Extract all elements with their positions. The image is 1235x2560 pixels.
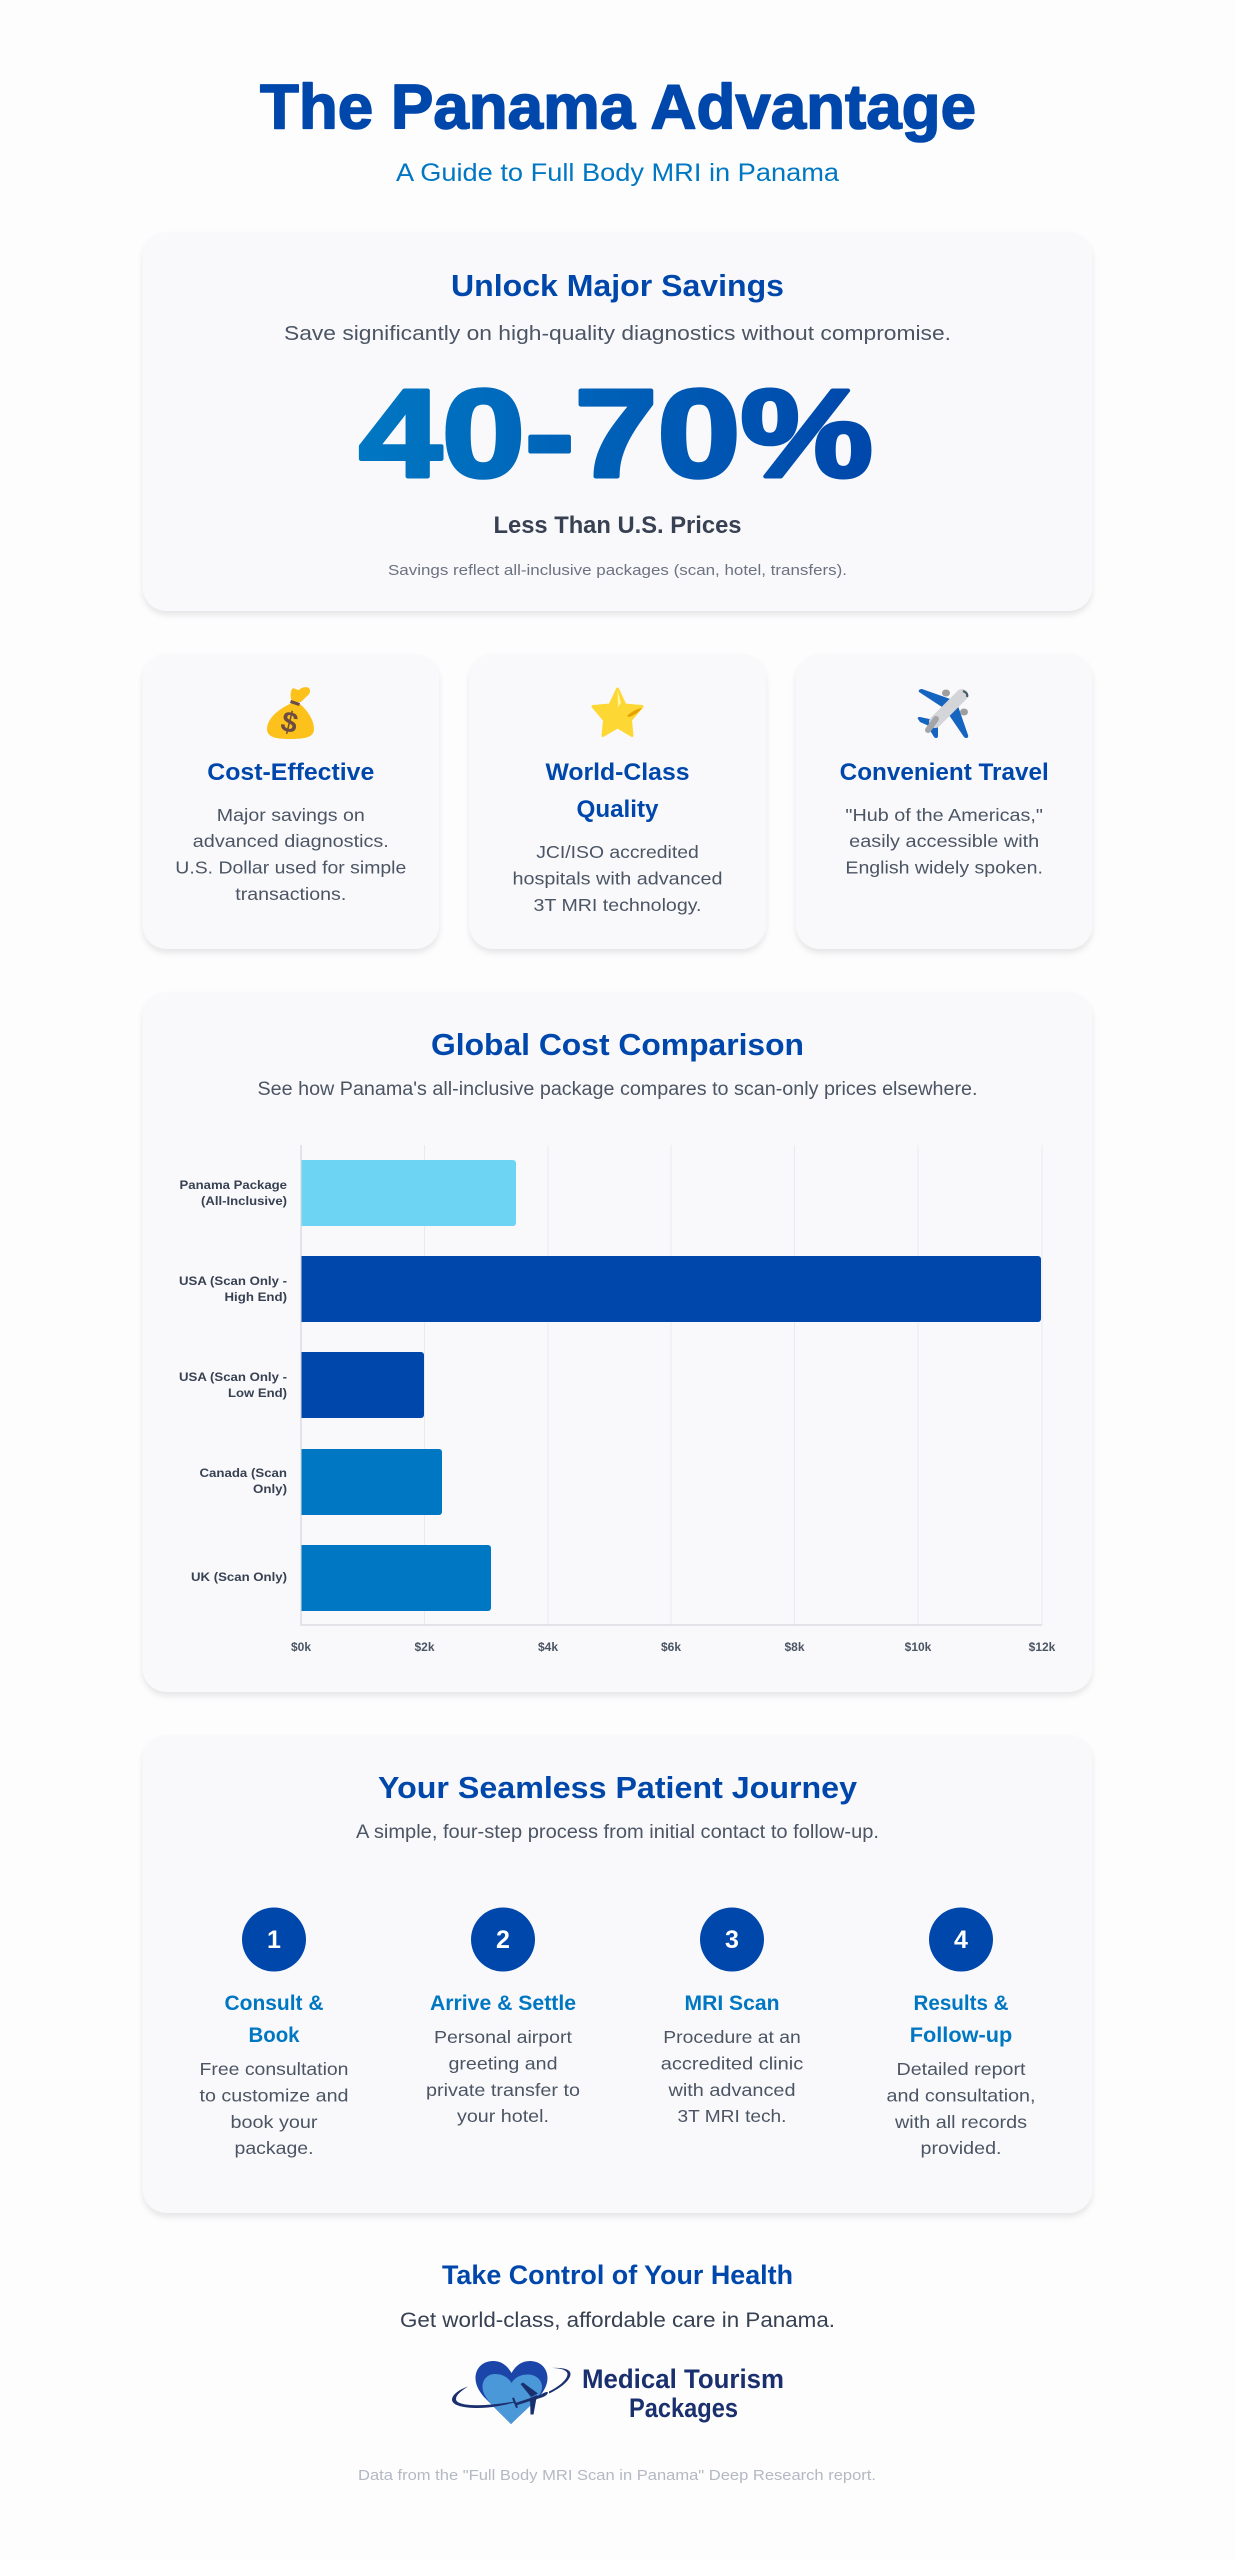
cost-effective text: [175, 805, 406, 904]
step 4: provided.: [920, 2138, 1002, 2158]
step 4: and consultation,: [886, 2086, 1036, 2106]
big stat: 40-70%: 40-70%: [359, 364, 873, 504]
panel: world-class quality: [469, 654, 766, 949]
step 3: MRI Scan: [684, 1992, 780, 2015]
x-axis labels: $10k: [905, 1640, 932, 1654]
convenient travel text: "Hub of the Americas,": [845, 805, 1043, 825]
step 4: [886, 1908, 1036, 2158]
y-axis labels: High End): [224, 1290, 287, 1304]
stat caption: Less Than U.S. Prices: [494, 512, 742, 539]
x-axis labels: $2k: [414, 1640, 435, 1654]
panel: convenient travel: [796, 654, 1093, 949]
convenient travel text: easily accessible with: [849, 831, 1039, 851]
heading: world-class quality: World-Class: [546, 759, 690, 786]
step 1: Consult &: [224, 1992, 324, 2015]
x-axis labels: $8k: [784, 1640, 805, 1654]
bar: USA low end: [302, 1352, 424, 1418]
step 3: [661, 1908, 804, 2126]
panel: global cost comparison: [142, 992, 1092, 1692]
panel: cost-effective: [142, 654, 439, 949]
bar chart: [179, 1145, 1056, 1654]
step 3: Procedure at an: [663, 2027, 801, 2047]
icon: money bag: $: [278, 705, 301, 740]
heading: comparison: Global Cost Comparison: [431, 1027, 804, 1062]
step 4: with all records: [894, 2112, 1027, 2132]
step 2: [426, 1908, 580, 2126]
icon: airplane: [918, 689, 968, 738]
panel: unlock major savings: [142, 232, 1092, 611]
bar: Panama package: [302, 1160, 516, 1226]
step 1: to customize and: [200, 2086, 348, 2106]
x-axis labels: $0k: [291, 1640, 311, 1654]
cost-effective text: U.S. Dollar used for simple: [175, 858, 406, 878]
x-axis labels: [291, 1640, 1056, 1654]
step 3: 3: [725, 1926, 739, 1954]
convenient travel text: English widely spoken.: [845, 858, 1043, 878]
step 4: Follow-up: [910, 2024, 1012, 2047]
x-axis labels: $12k: [1029, 1640, 1056, 1654]
journey description: A simple, four-step process from initial contact to follow-up.: [356, 1822, 879, 1843]
heading: journey: Your Seamless Patient Journey: [378, 1770, 858, 1805]
y-axis labels: UK (Scan Only): [191, 1570, 287, 1584]
step 1: Book: [248, 2024, 300, 2047]
step 2: greeting and: [448, 2054, 558, 2074]
y-axis labels: Only): [253, 1482, 287, 1496]
savings footnote: Savings reflect all-inclusive packages (scan, hotel, transfers).: [388, 562, 847, 579]
cost-effective text: advanced diagnostics.: [193, 831, 389, 851]
logo orbit and plane: [452, 2368, 570, 2414]
icon: money bag: [267, 687, 314, 740]
step 1: package.: [234, 2138, 314, 2158]
heading: cost-effective: Cost-Effective: [207, 759, 374, 786]
y-axis labels: [179, 1178, 287, 1584]
logo: Medical Tourism Packages: [452, 2361, 784, 2424]
world-class text: hospitals with advanced: [512, 868, 722, 888]
source note: Data from the "Full Body MRI Scan in Panama" Deep Research report.: [358, 2467, 876, 2484]
subtitle: A Guide to Full Body MRI in Panama: [396, 159, 839, 187]
y-axis labels: USA (Scan Only -: [179, 1370, 287, 1384]
logo wordmark: Medical Tourism: [582, 2364, 784, 2394]
call to action text: Get world-class, affordable care in Panama.: [400, 2309, 835, 2332]
heading: convenient travel: Convenient Travel: [840, 759, 1049, 786]
step 3: with advanced: [667, 2080, 796, 2100]
panel: patient journey: [142, 1735, 1092, 2213]
step 2: Personal airport: [434, 2027, 572, 2047]
bar: USA high end: [302, 1256, 1041, 1322]
step 4: 4: [954, 1926, 968, 1954]
step 3: 3T MRI tech.: [678, 2106, 786, 2126]
heading: world-class quality: Quality: [576, 796, 659, 823]
step 2: Arrive & Settle: [430, 1992, 576, 2015]
step 4: Results &: [914, 1992, 1008, 2015]
bar: Canada: [302, 1449, 442, 1515]
step 2: your hotel.: [457, 2106, 549, 2126]
x-axis labels: $4k: [538, 1640, 558, 1654]
step 1: Free consultation: [200, 2059, 348, 2079]
world-class text: [512, 842, 722, 915]
y-axis labels: Canada (Scan: [200, 1466, 287, 1480]
y-axis labels: Low End): [228, 1386, 287, 1400]
comparison description: See how Panama's all-inclusive package compares to scan-only prices elsewhere.: [258, 1079, 978, 1100]
x-axis labels: $6k: [661, 1640, 681, 1654]
step 1: [200, 1908, 348, 2158]
savings description: Save significantly on high-quality diagnostics without compromise.: [284, 323, 951, 345]
title: The Panama Advantage: [260, 72, 976, 142]
step 4: Detailed report: [896, 2059, 1026, 2079]
world-class text: 3T MRI technology.: [534, 895, 702, 915]
cost-effective text: transactions.: [235, 884, 346, 904]
logo wordmark: [582, 2364, 784, 2423]
step 3: accredited clinic: [661, 2054, 804, 2074]
y-axis labels: USA (Scan Only -: [179, 1274, 287, 1288]
logo heart: [476, 2361, 548, 2424]
convenient travel text: [845, 805, 1043, 878]
step 2: 2: [496, 1926, 510, 1954]
heading: world-class quality: [546, 759, 690, 823]
logo wordmark: Packages: [629, 2393, 738, 2423]
heading: savings: Unlock Major Savings: [451, 268, 784, 303]
y-axis labels: (All-Inclusive): [201, 1194, 287, 1208]
step 1: 1: [267, 1926, 281, 1954]
cost-effective text: Major savings on: [217, 805, 365, 825]
world-class text: JCI/ISO accredited: [536, 842, 699, 862]
y-axis labels: Panama Package: [180, 1178, 287, 1192]
step 1: book your: [230, 2112, 318, 2132]
bar: UK: [302, 1545, 491, 1611]
call to action heading: Take Control of Your Health: [442, 2260, 793, 2290]
icon: star: [593, 689, 642, 736]
step 2: private transfer to: [426, 2080, 580, 2100]
